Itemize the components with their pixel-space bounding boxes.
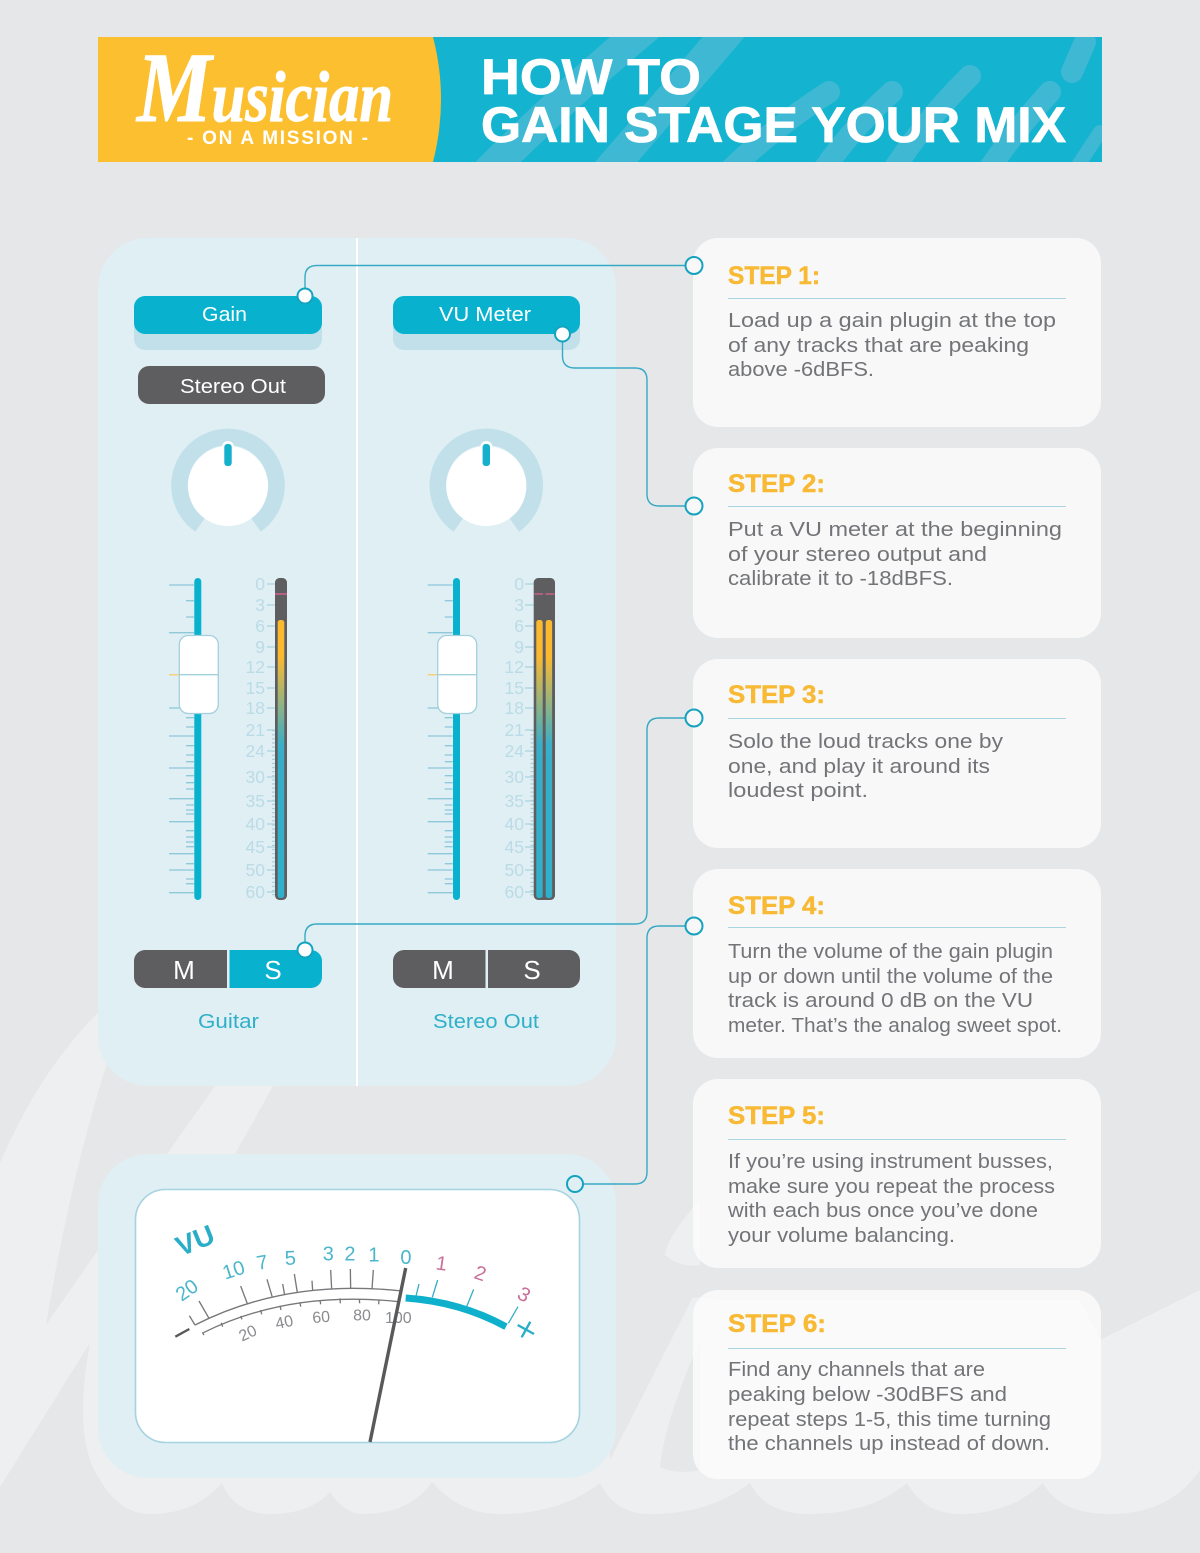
level scale right: 9 [514, 637, 524, 657]
level scale right: 24 [505, 741, 524, 761]
VU Meter button [393, 296, 580, 350]
Gain button: Gain [202, 304, 247, 326]
step 4 card [693, 869, 1101, 1058]
mute solo left [134, 950, 322, 988]
scale arcs [189, 1269, 402, 1335]
level scale left: 45 [246, 837, 265, 857]
step 1 card: STEP 1: [728, 262, 820, 290]
meter dial [171, 1219, 534, 1345]
step 6 card: repeat steps 1-5, this time turning [728, 1408, 1051, 1431]
knob left [180, 437, 276, 526]
connector: VU dial to step 4 [567, 918, 702, 1192]
step 1 card: Load up a gain plugin at the top [728, 309, 1056, 332]
lower scale numbers: 100 [385, 1310, 412, 1327]
upper scale numbers: 0 [400, 1247, 412, 1269]
step 6 card: peaking below -30dBFS and [728, 1383, 1007, 1406]
upper scale numbers: 1 [368, 1244, 380, 1266]
level scale left: 6 [255, 616, 265, 636]
step 4 card: meter. That’s the analog sweet spot. [728, 1014, 1062, 1037]
Stereo Out button: Stereo Out [180, 376, 286, 398]
level scale left: 40 [246, 814, 265, 834]
title [481, 49, 1066, 153]
level scale left: 9 [255, 637, 265, 657]
level scale right: 60 [505, 882, 524, 902]
minus sign [175, 1329, 189, 1337]
panel: VU meter [98, 1154, 616, 1478]
level scale right: 40 [505, 814, 524, 834]
step 6 card: STEP 6: [728, 1310, 826, 1338]
lower scale numbers: 20 [236, 1322, 260, 1345]
step 5 card: with each bus once you’ve done [727, 1199, 1038, 1222]
step 3 card: Solo the loud tracks one by [728, 730, 1004, 753]
level scale right: 0 [514, 574, 524, 594]
mute solo left: S [264, 955, 282, 985]
step 2 card: Put a VU meter at the beginning [728, 518, 1062, 541]
Gain button [134, 296, 322, 350]
panel: mixer channels [98, 238, 616, 1086]
header banner [98, 37, 1102, 162]
upper scale numbers: 7 [255, 1251, 270, 1275]
upper scale numbers: 3 [323, 1244, 334, 1266]
knob right [438, 437, 535, 526]
fader left [169, 578, 218, 900]
VU label: VU [171, 1219, 219, 1262]
connector: gain to step 1 [298, 257, 702, 304]
upper scale numbers: 1 [434, 1252, 449, 1276]
mute solo right: S [523, 955, 541, 985]
level scale right [505, 574, 534, 902]
step 3 card: STEP 3: [728, 681, 825, 709]
level scale right: 50 [505, 860, 524, 880]
level scale left: 24 [246, 741, 265, 761]
step 5 card [693, 1079, 1101, 1268]
level meter left [275, 578, 287, 900]
needle [370, 1268, 406, 1442]
mute solo right: M [432, 955, 454, 985]
step 5 card: your volume balancing. [728, 1224, 955, 1247]
step 4 card: STEP 4: [728, 892, 825, 920]
lower scale numbers: 80 [353, 1308, 371, 1325]
upper scale numbers [172, 1244, 534, 1307]
step 1 card: above -6dBFS. [728, 358, 874, 381]
title: HOW TO [481, 49, 701, 105]
level meter right [534, 578, 555, 900]
upper scale numbers: 5 [284, 1247, 296, 1270]
level scale left: 21 [246, 720, 265, 740]
level scale left: 35 [246, 791, 265, 811]
VU Meter button: VU Meter [439, 304, 531, 326]
level scale left: 60 [246, 882, 265, 902]
step 5 card: make sure you repeat the process [728, 1175, 1055, 1198]
level scale right: 21 [505, 720, 524, 740]
level scale right: 3 [514, 595, 524, 615]
step 6 card [693, 1290, 1101, 1479]
connector: solo to step 3 [298, 710, 702, 958]
lower scale numbers: 40 [274, 1313, 295, 1333]
step 2 card: calibrate it to -18dBFS. [728, 567, 953, 590]
level scale left: 15 [246, 678, 265, 698]
step 2 card: of your stereo output and [728, 543, 987, 566]
lower scale numbers [236, 1308, 412, 1345]
level scale right: 15 [505, 678, 524, 698]
logo: Musician [135, 32, 393, 143]
step 2 card: STEP 2: [728, 470, 825, 498]
upper scale numbers: 2 [471, 1262, 489, 1286]
step 1 card [693, 238, 1101, 427]
step 4 card: up or down until the volume of the [728, 965, 1053, 988]
level scale right: 12 [505, 657, 524, 677]
channel label guitar: Guitar [198, 1011, 259, 1033]
title: GAIN STAGE YOUR MIX [481, 97, 1066, 153]
step 6 card: Find any channels that are [728, 1358, 985, 1381]
step 1 card: of any tracks that are peaking [728, 334, 1029, 357]
channel label stereo out: Stereo Out [433, 1011, 539, 1033]
upper scale numbers: 10 [220, 1257, 248, 1285]
connector: VU meter to step 2 [555, 326, 702, 514]
step 4 card: track is around 0 dB on the VU [728, 989, 1033, 1012]
step 3 card: loudest point. [728, 779, 868, 802]
header script watermark [476, 37, 1102, 162]
upper scale numbers: 3 [513, 1283, 534, 1307]
upper scale numbers: 2 [344, 1244, 356, 1266]
upper scale numbers: 20 [172, 1275, 203, 1306]
level scale left: 30 [246, 767, 265, 787]
logo panel [98, 37, 441, 162]
level scale left: 0 [255, 574, 265, 594]
Stereo Out button [138, 366, 325, 404]
level scale left: 3 [255, 595, 265, 615]
step 6 card: the channels up instead of down. [728, 1432, 1050, 1455]
step 5 card: If you’re using instrument busses, [728, 1150, 1053, 1173]
mute solo right [393, 950, 580, 988]
level scale right: 30 [505, 767, 524, 787]
background script watermark [0, 960, 1200, 1514]
logo: - ON A MISSION - [187, 128, 368, 149]
step 3 card [693, 659, 1101, 848]
level scale left [246, 574, 275, 902]
step 4 card: Turn the volume of the gain plugin [728, 940, 1053, 963]
step 2 card [693, 448, 1101, 638]
level scale left: 12 [246, 657, 265, 677]
level scale right: 45 [505, 837, 524, 857]
level scale right: 6 [514, 616, 524, 636]
level scale right: 18 [505, 698, 524, 718]
level scale left: 18 [246, 698, 265, 718]
level scale left: 50 [246, 860, 265, 880]
mute solo left: M [173, 955, 195, 985]
lower scale numbers: 60 [312, 1309, 331, 1327]
plus sign [518, 1322, 534, 1337]
level scale right: 35 [505, 791, 524, 811]
step 3 card: one, and play it around its [728, 755, 990, 778]
red zone bar [406, 1298, 506, 1327]
fader right [428, 578, 477, 900]
step 5 card: STEP 5: [728, 1102, 825, 1130]
